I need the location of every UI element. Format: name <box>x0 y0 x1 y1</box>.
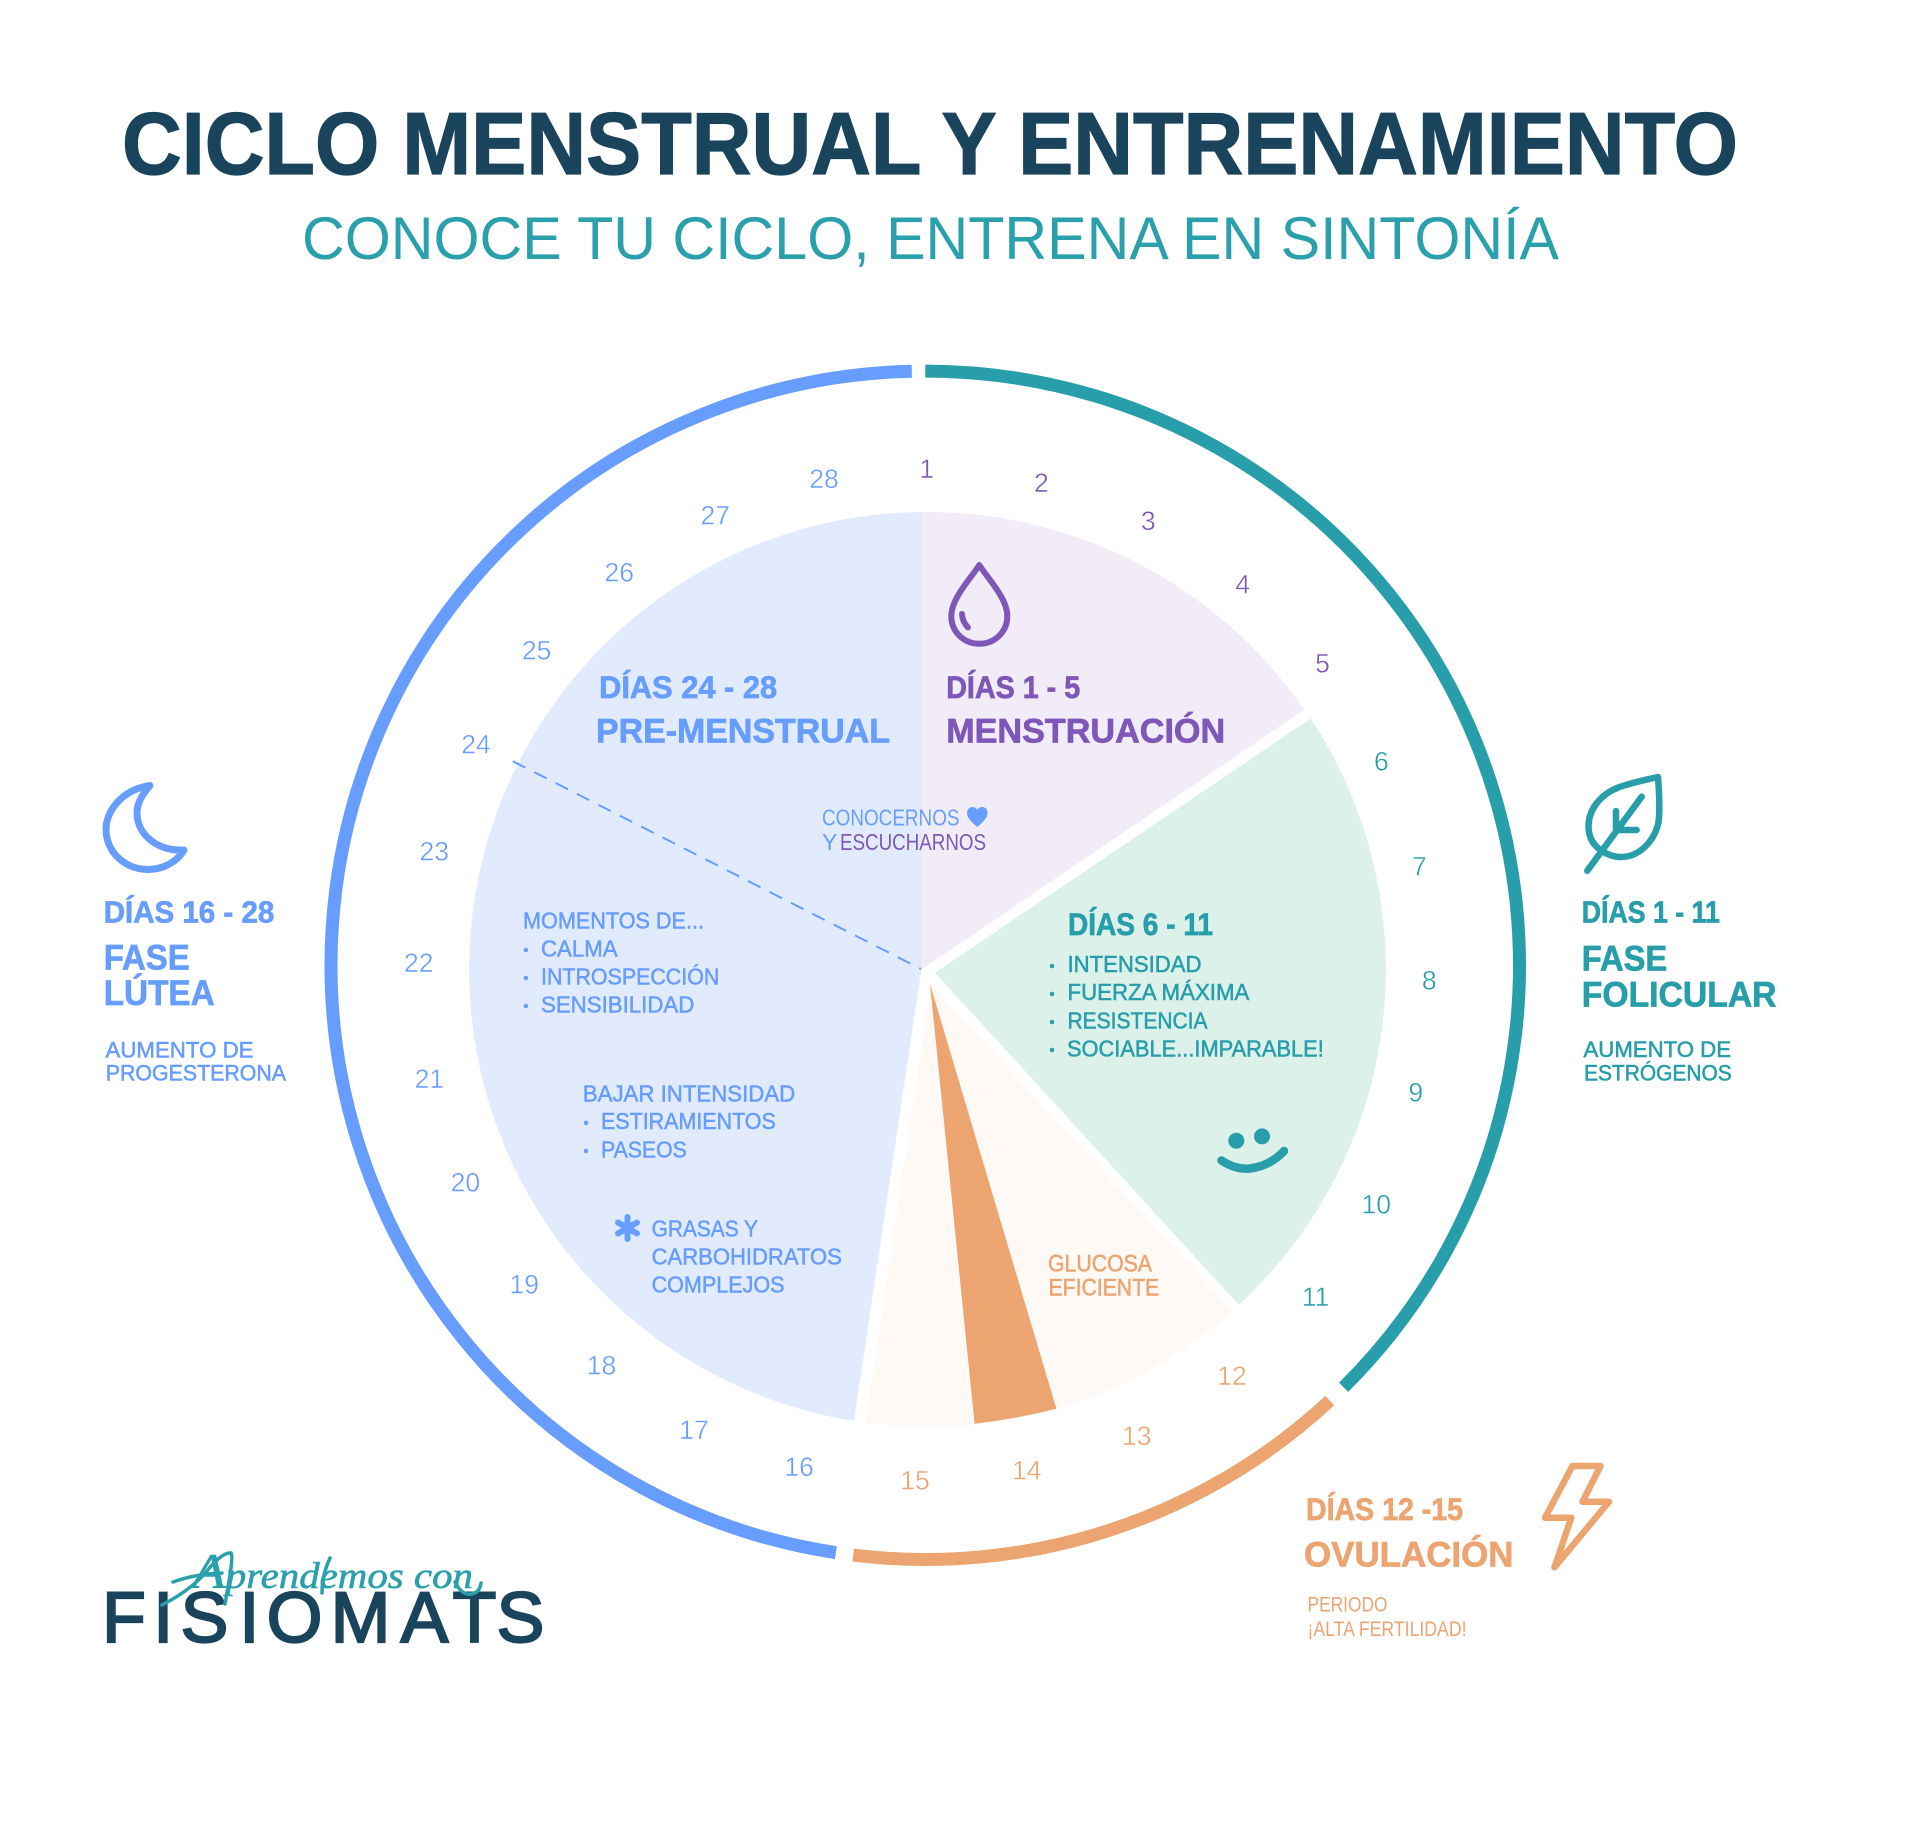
days 6-11: 10 <box>1362 1190 1391 1220</box>
days 12-15: 12 <box>1217 1361 1247 1391</box>
outer phase ring <box>331 371 1519 1559</box>
days 1-5: 4 <box>1235 569 1250 599</box>
days 16-28: 20 <box>451 1168 480 1198</box>
sector: ovulation day 14 <box>930 984 1056 1424</box>
days 6-11: 6 <box>1374 746 1389 776</box>
panel: menstruation heading <box>946 669 1225 751</box>
logo script: Aprendemos con <box>189 1543 473 1599</box>
ring arc: follicular phase <box>925 371 1519 1387</box>
title: CICLO MENSTRUAL Y ENTRENAMIENTO <box>122 94 1738 193</box>
days 1-5: 3 <box>1141 506 1156 536</box>
text block: bajar intensidad: BAJAR INTENSIDAD <box>583 1081 795 1107</box>
panel: follicular phase <box>1582 777 1776 1086</box>
icon: water drop <box>951 565 1007 644</box>
text block: glucosa eficiente <box>1048 1251 1159 1301</box>
panel: ovulation: ¡ALTA FERTILIDAD! <box>1308 1618 1466 1641</box>
text block: momentos de: SENSIBILIDAD <box>541 992 694 1018</box>
days 12-15 <box>900 1361 1247 1495</box>
panel: follicular phase: FASE <box>1582 940 1667 979</box>
icon: smiley <box>1222 1128 1284 1169</box>
panel: menstruation heading: MENSTRUACIÓN <box>946 711 1225 751</box>
icon: lightning bolt <box>1545 1466 1609 1567</box>
ring arc: ovulation <box>853 1401 1330 1559</box>
ring arc: luteal phase <box>331 371 912 1553</box>
panel: ovulation: DÍAS 12 -15 <box>1306 1491 1463 1527</box>
days 16-28: 28 <box>809 464 839 494</box>
days 12-15: 13 <box>1122 1421 1151 1451</box>
panel: days 6-11 text: DÍAS 6 - 11 <box>1068 906 1213 942</box>
text block: glucosa eficiente: GLUCOSA <box>1048 1251 1152 1278</box>
days 16-28: 18 <box>587 1351 616 1381</box>
text block: bajar intensidad: ESTIRAMIENTOS <box>601 1108 776 1134</box>
text block: momentos de: CALMA <box>541 936 618 962</box>
dashed divider <box>513 761 921 969</box>
days 16-28 <box>404 464 839 1482</box>
days 16-28: 27 <box>701 501 730 531</box>
text block: bajar intensidad <box>583 1081 795 1162</box>
text block: momentos de <box>523 908 719 1018</box>
logo <box>102 1543 544 1658</box>
panel: ovulation: OVULACIÓN <box>1304 1535 1514 1575</box>
days 16-28: 22 <box>404 948 433 978</box>
days 12-15: 14 <box>1012 1455 1042 1485</box>
panel: luteal phase: PROGESTERONA <box>106 1061 286 1086</box>
text block: grasas y carbohidratos: COMPLEJOS <box>652 1272 784 1298</box>
days 6-11: 8 <box>1422 966 1437 996</box>
sector: menstruation <box>922 512 1304 970</box>
panel: days 6-11 text <box>1050 906 1324 1062</box>
callout: conocernos y escucharnos: CONOCERNOS <box>822 805 960 831</box>
icon: heart <box>967 807 988 827</box>
icon: moon <box>106 786 184 870</box>
icon: asterisk <box>618 1217 637 1239</box>
logo wordmark: FISIOMATS <box>102 1578 544 1658</box>
callout: conocernos y escucharnos: ESCUCHARNOS <box>840 829 986 855</box>
panel: luteal phase: DÍAS 16 - 28 <box>104 895 274 930</box>
sector: follicular days 6-11 <box>935 718 1386 1305</box>
days 16-28: 24 <box>461 730 491 760</box>
panel: follicular phase: ESTRÓGENOS <box>1584 1061 1732 1086</box>
panel: luteal phase: FASE <box>104 938 190 977</box>
days 16-28: 26 <box>604 558 634 588</box>
text block: grasas y carbohidratos <box>652 1215 842 1298</box>
panel: days 6-11 text: RESISTENCIA <box>1068 1007 1208 1033</box>
days 12-15: 15 <box>900 1465 930 1495</box>
days 16-28: 23 <box>419 836 449 866</box>
pie wheel <box>469 512 1386 1427</box>
text block: momentos de: INTROSPECCIÓN <box>541 964 719 990</box>
days 16-28: 19 <box>510 1270 539 1300</box>
panel: luteal phase: LÚTEA <box>104 973 215 1013</box>
panel: menstruation heading: DÍAS 1 - 5 <box>946 669 1080 705</box>
text block: bajar intensidad: PASEOS <box>601 1136 687 1162</box>
days 16-28: 25 <box>522 635 551 665</box>
panel: luteal phase <box>104 786 286 1086</box>
callout: conocernos y escucharnos <box>822 805 988 855</box>
days 16-28: 16 <box>784 1452 814 1482</box>
panel: pre-menstrual heading <box>596 669 890 751</box>
days 1-5 <box>919 454 1330 678</box>
callout: conocernos y escucharnos: Y <box>822 829 837 855</box>
panel: pre-menstrual heading: DÍAS 24 - 28 <box>599 669 777 705</box>
days 16-28: 21 <box>415 1064 444 1094</box>
panel: follicular phase: DÍAS 1 - 11 <box>1582 895 1720 930</box>
days 1-5: 2 <box>1034 468 1049 498</box>
panel: luteal phase: AUMENTO DE <box>106 1038 254 1063</box>
sector: luteal / pre-menstrual <box>469 512 922 1421</box>
panel: follicular phase: FOLICULAR <box>1582 976 1776 1015</box>
panel: ovulation <box>1304 1466 1609 1641</box>
text block: momentos de: MOMENTOS DE... <box>523 908 704 934</box>
sector: ovulation <box>866 985 1232 1427</box>
day numbers <box>404 454 1437 1495</box>
panel: days 6-11 text: FUERZA MÁXIMA <box>1068 979 1250 1005</box>
logo swash <box>162 1553 481 1605</box>
panel: follicular phase: AUMENTO DE <box>1584 1037 1731 1062</box>
days 1-5: 5 <box>1315 648 1330 678</box>
days 1-5: 1 <box>919 454 934 484</box>
icon: leaf <box>1587 777 1659 871</box>
days 16-28: 17 <box>679 1415 709 1445</box>
days 6-11: 11 <box>1302 1282 1329 1312</box>
days 6-11 <box>1302 746 1437 1312</box>
text block: grasas y carbohidratos: CARBOHIDRATOS <box>652 1244 842 1270</box>
days 6-11: 7 <box>1412 851 1427 881</box>
panel: ovulation: PERIODO <box>1308 1594 1388 1617</box>
text block: grasas y carbohidratos: GRASAS Y <box>652 1215 758 1241</box>
panel: days 6-11 text: SOCIABLE...IMPARABLE! <box>1067 1036 1324 1062</box>
days 6-11: 9 <box>1408 1077 1423 1107</box>
panel: pre-menstrual heading: PRE-MENSTRUAL <box>596 713 890 751</box>
panel: days 6-11 text: INTENSIDAD <box>1068 951 1202 977</box>
subtitle: CONOCE TU CICLO, ENTRENA EN SINTONÍA <box>302 205 1559 272</box>
text block: glucosa eficiente: EFICIENTE <box>1048 1274 1159 1301</box>
